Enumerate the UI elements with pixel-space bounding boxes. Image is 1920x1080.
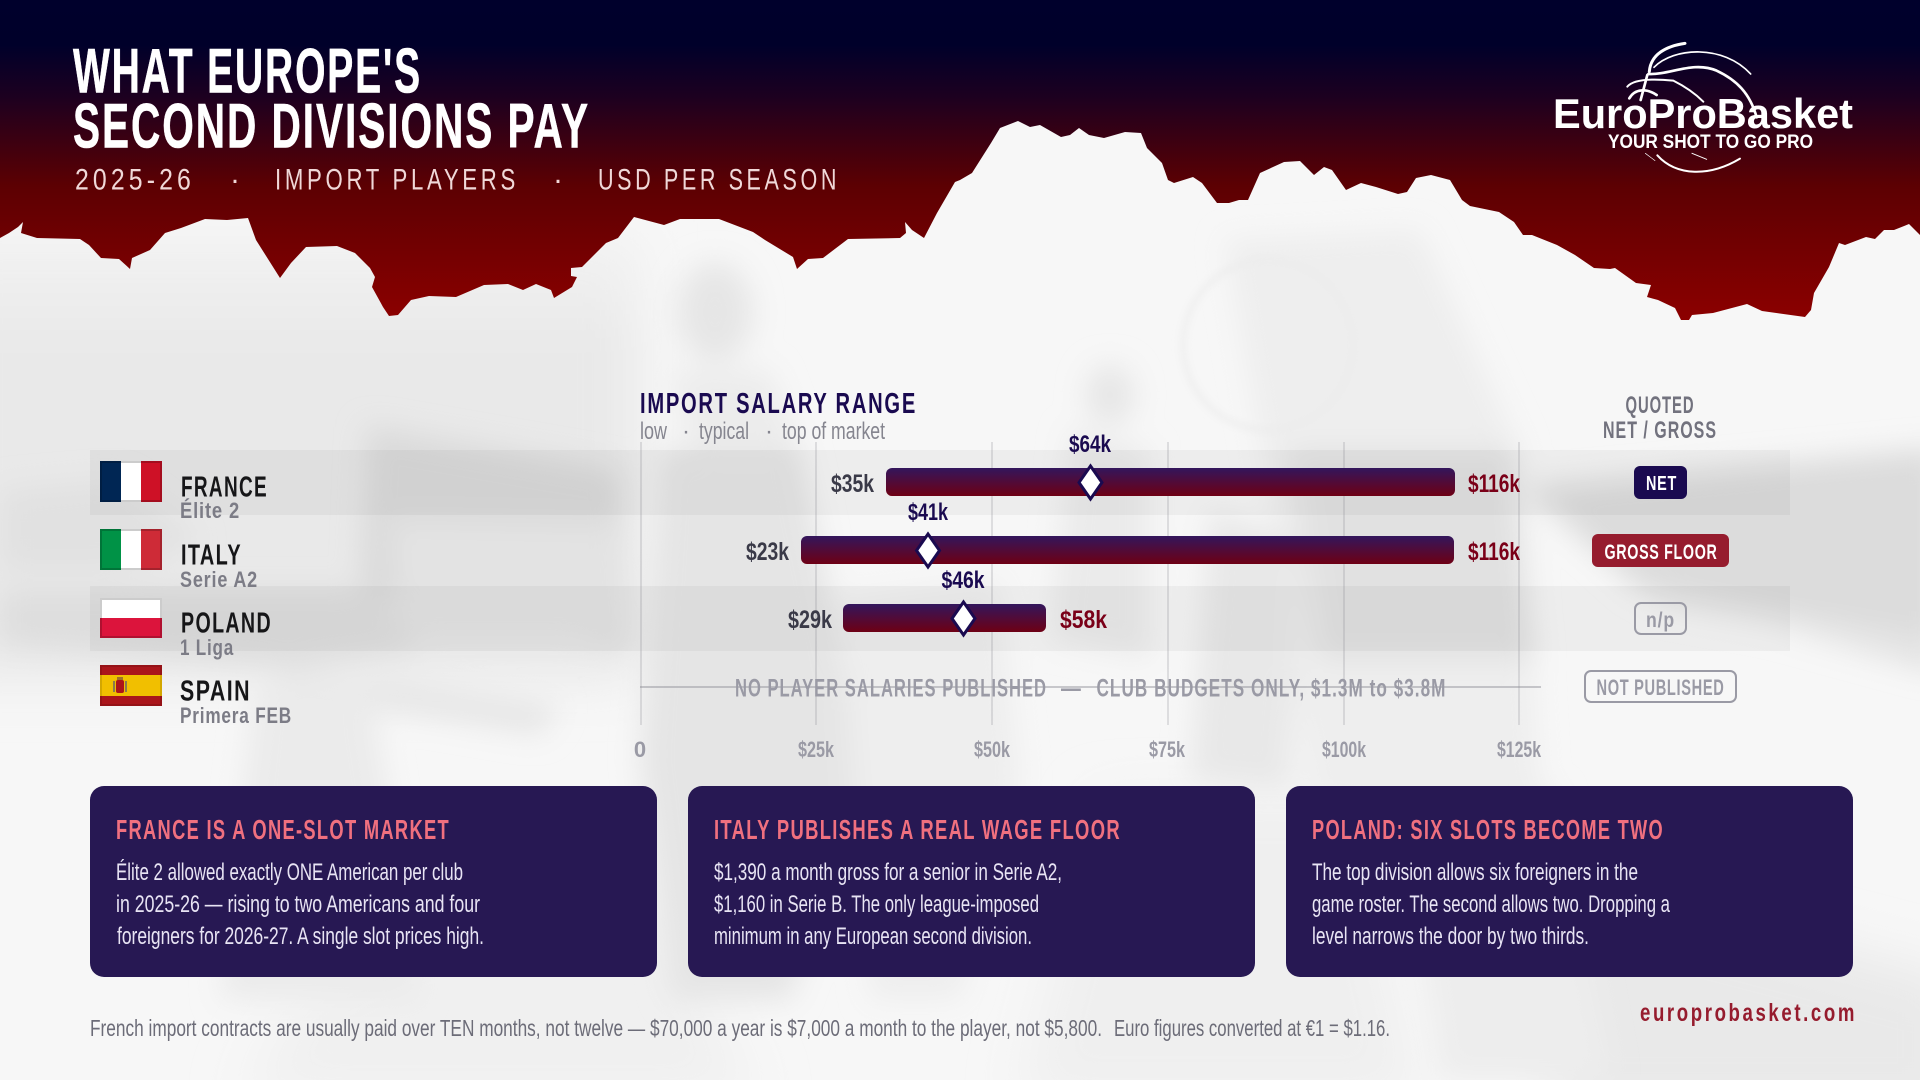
column heading: quoted net / gross: QUOTED: [1626, 392, 1694, 419]
logo: EuroProBasket: YOUR SHOT TO GO PRO: [1608, 132, 1813, 153]
row: France: $116k: [1468, 470, 1520, 498]
panel: France insight: FRANCE IS A ONE-SLOT MARKET: [116, 814, 450, 845]
x axis labels: 0: [634, 737, 646, 762]
row: Spain: SPAIN: [180, 676, 251, 708]
chart legend: low: [640, 418, 667, 445]
icon: basketball swooshes: [1627, 43, 1757, 172]
x axis labels: $75k: [1149, 737, 1186, 762]
panel: Italy insight: minimum in any European second division.: [714, 923, 1032, 950]
range bar: Poland: [843, 604, 1046, 632]
chart grid: [640, 442, 1541, 725]
row: Spain: [100, 665, 1736, 728]
title: [73, 36, 590, 162]
panel: Poland insight: POLAND: SIX SLOTS BECOME TWO: [1312, 814, 1664, 845]
row: Poland: $58k: [1060, 606, 1107, 634]
subtitle: 2025-26: [75, 164, 195, 196]
row: Italy: $116k: [1468, 538, 1520, 566]
panel: France insight: [90, 786, 657, 977]
range bar: Italy: [801, 536, 1454, 564]
row: Poland: POLAND: [181, 608, 272, 640]
badge: gross floor: GROSS FLOOR: [1604, 541, 1718, 564]
flag: France: [100, 461, 162, 502]
marker: Poland typical: [952, 602, 975, 635]
x axis labels: [634, 737, 1542, 762]
row: France: $35k: [831, 470, 874, 498]
panel: France insight: in 2025-26 — rising to two Americans and four: [116, 891, 480, 918]
subtitle: USD PER SEASON: [598, 164, 840, 196]
badge: not published: [1585, 671, 1736, 702]
column heading: quoted net / gross: [1603, 392, 1717, 444]
footnote: French import contracts are usually paid over TEN months, not twelve — $70,000 a year is $7,000 a month to the player, not $5,800.: [90, 1015, 1102, 1041]
badge: gross floor: [1592, 534, 1729, 567]
row: Poland: $46k: [942, 567, 985, 594]
chart legend: ·: [682, 418, 690, 445]
logo: EuroProBasket: [1553, 43, 1853, 172]
flag: Italy: [100, 529, 162, 570]
title: WHAT EUROPE'S: [73, 36, 422, 106]
panel: Italy insight: $1,390 a month gross for a senior in Serie A2,: [714, 859, 1062, 886]
x axis labels: $100k: [1322, 737, 1367, 762]
column heading: quoted net / gross: NET / GROSS: [1603, 417, 1717, 444]
panel: France insight: foreigners for 2026-27. A single slot prices high.: [117, 923, 484, 950]
x axis labels: $125k: [1497, 737, 1542, 762]
chart legend: ·: [765, 418, 773, 445]
panel: Poland insight: [1286, 786, 1853, 977]
badge: n/p: [1635, 603, 1686, 634]
range bar: France: [886, 468, 1455, 496]
marker: Italy typical: [916, 534, 940, 567]
row bands: [90, 450, 1790, 651]
row: Spain: Primera FEB: [180, 703, 292, 728]
row: Poland: $29k: [788, 606, 832, 634]
row: France: Élite 2: [180, 498, 240, 523]
row: Italy: [100, 499, 1729, 592]
subtitle: IMPORT PLAYERS: [275, 164, 519, 196]
no salary note: NO PLAYER SALARIES PUBLISHED: [735, 674, 1047, 702]
chart legend: top of market: [782, 418, 885, 445]
row: France: [100, 431, 1687, 523]
title: SECOND DIVISIONS PAY: [73, 92, 590, 162]
no salary note: [735, 674, 1446, 702]
row: Italy: ITALY: [181, 540, 242, 572]
panel: France insight: Élite 2 allowed exactly ONE American per club: [116, 859, 463, 886]
logo: EuroProBasket: EuroProBasket: [1553, 90, 1853, 137]
subtitle: ·: [553, 164, 568, 196]
subtitle: [75, 164, 840, 196]
x axis labels: $50k: [974, 737, 1011, 762]
marker: France typical: [1079, 466, 1102, 499]
badge: net: [1634, 466, 1687, 499]
chart legend: [640, 418, 885, 445]
row: Poland: [100, 567, 1686, 660]
x axis labels: $25k: [798, 737, 835, 762]
chart legend: typical: [699, 418, 749, 445]
no salary note: CLUB BUDGETS ONLY, $1.3M to $3.8M: [1096, 674, 1446, 702]
subtitle: ·: [230, 164, 245, 196]
panel: Italy insight: [688, 786, 1255, 977]
panel: Poland insight: The top division allows six foreigners in the: [1312, 859, 1638, 886]
row: Italy: Serie A2: [180, 567, 258, 592]
badge: net: NET: [1646, 473, 1677, 495]
row: France: FRANCE: [181, 472, 268, 504]
no salary note: —: [1061, 674, 1082, 702]
row: Italy: $23k: [746, 538, 789, 566]
flag: Poland: [100, 598, 162, 638]
panel: Poland insight: level narrows the door by two thirds.: [1312, 923, 1589, 950]
panel: Italy insight: $1,160 in Serie B. The only league-imposed: [714, 891, 1039, 918]
row: France: $64k: [1069, 431, 1112, 458]
row: Italy: $41k: [908, 499, 948, 526]
row: Poland: 1 Liga: [180, 635, 234, 660]
flag: Spain: [100, 665, 162, 706]
chart heading: IMPORT SALARY RANGE: [640, 388, 917, 420]
panel: Italy insight: ITALY PUBLISHES A REAL WAGE FLOOR: [714, 814, 1121, 845]
badge: n/p: n/p: [1646, 609, 1675, 632]
header: torn gradient banner: [0, 0, 1920, 320]
badge: not published: NOT PUBLISHED: [1596, 675, 1724, 700]
panel: Poland insight: game roster. The second allows two. Dropping a: [1312, 891, 1670, 918]
footnote: Euro figures converted at €1 = $1.16.: [1114, 1015, 1390, 1041]
